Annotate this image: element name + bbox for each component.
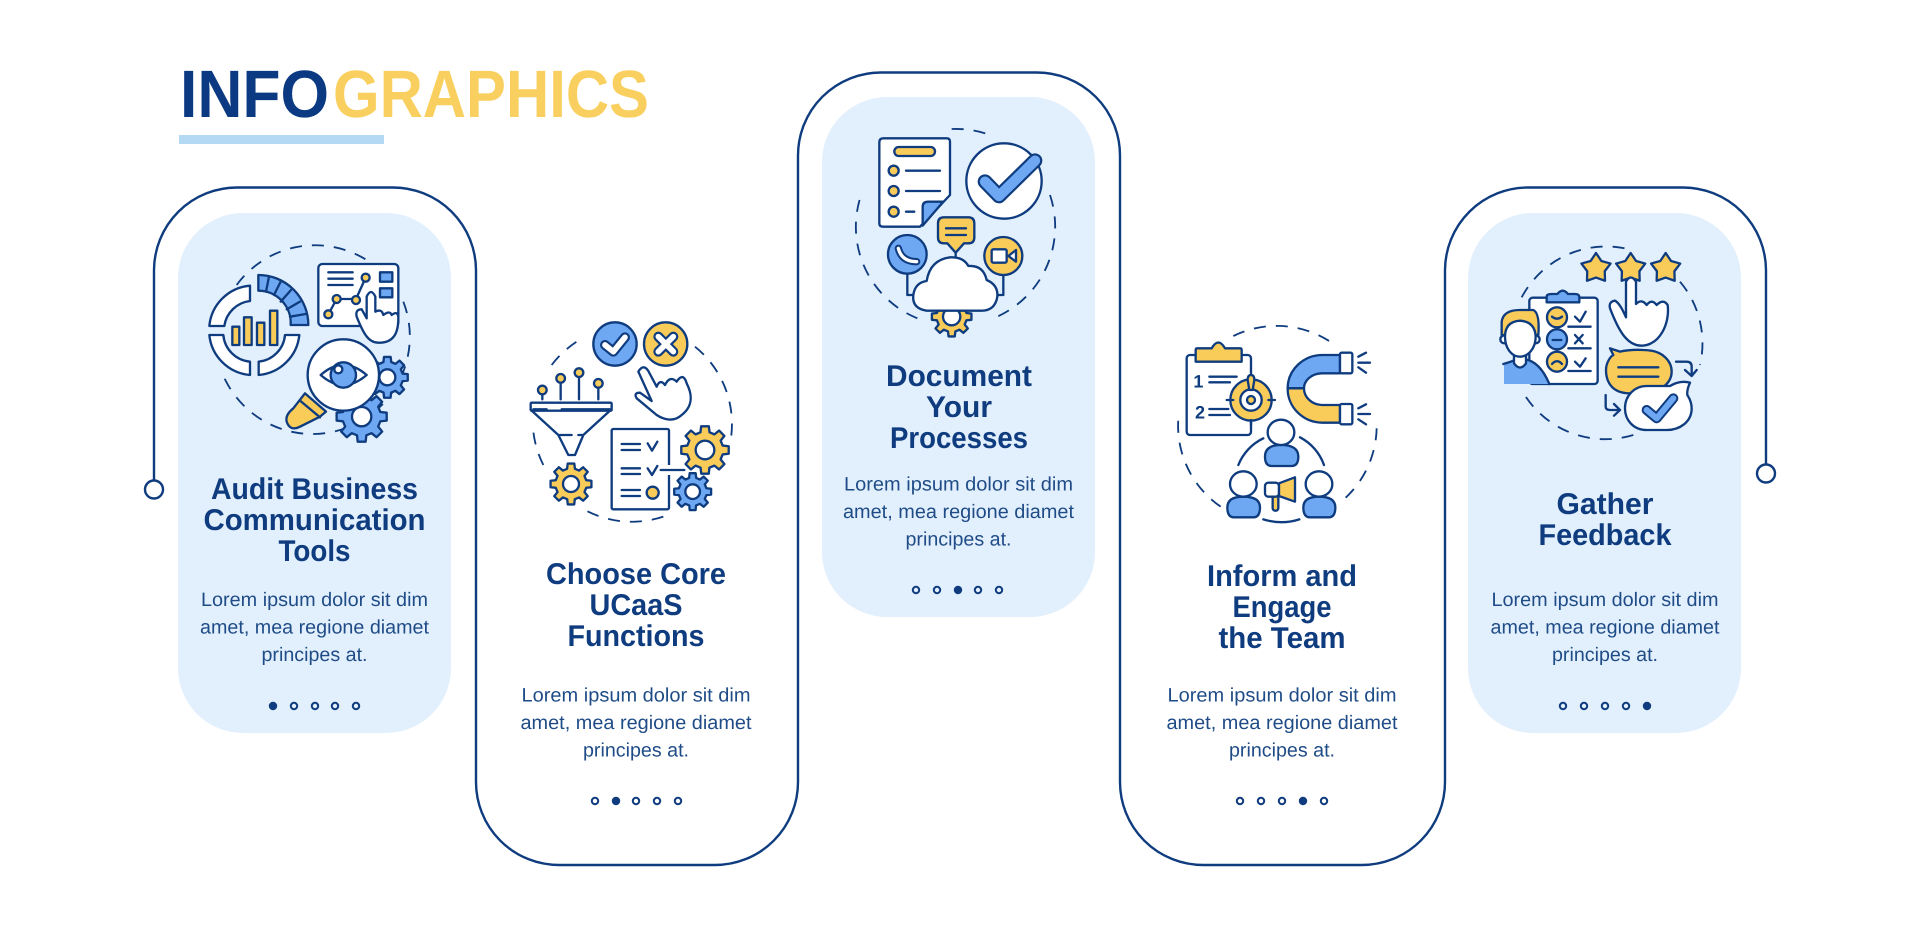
text: choose body: Lorem ipsum dolor sit dim [522,684,750,706]
text: gather body: Lorem ipsum dolor sit dim [1492,589,1718,611]
heading: choose [546,558,726,653]
heading: document: Your [926,391,992,424]
pager dots: step 4 [1237,798,1327,804]
heading: choose: Functions [568,620,704,653]
heading: document [886,360,1032,455]
heading: audit: Audit Business [211,473,418,506]
text: gather body [1490,589,1720,666]
pager dots: step 2 [592,798,681,804]
pager dots: step 3 [913,587,1002,593]
text: document body: principes at. [906,528,1012,550]
heading: audit [204,473,426,568]
panel background: document [822,97,1095,617]
title: INFOGRAPHICS: INFO [180,57,329,132]
text: audit body: Lorem ipsum dolor sit dim [201,589,428,611]
heading: audit: Communication [204,504,426,537]
heading: document: Processes [890,422,1028,455]
panel background: audit [178,213,451,733]
text: document body: Lorem ipsum dolor sit dim [844,474,1073,496]
text: gather body: principes at. [1552,644,1658,666]
heading: document: Document [886,360,1032,393]
connecting outline [145,72,1775,865]
panel background: feedback [1468,213,1741,733]
heading: inform: Engage [1232,591,1332,624]
icon: audit tools [209,245,410,442]
heading: gather: Gather [1556,488,1654,521]
heading: choose: UCaaS [590,589,682,622]
text: document body: amet, mea regione diamet [843,501,1075,523]
text: choose body: principes at. [583,740,689,762]
text: inform body: Lorem ipsum dolor sit dim [1168,684,1396,706]
heading: audit: Tools [278,535,350,568]
text: choose body: amet, mea regione diamet [520,712,752,734]
heading: inform: the Team [1218,622,1346,655]
text: inform body: principes at. [1229,740,1335,762]
text: audit body: amet, mea regione diamet [200,616,430,638]
text: inform body [1166,684,1398,762]
icon: inform and engage [1178,326,1377,522]
heading: choose: Choose Core [546,558,726,591]
icon: choose functions [531,322,732,522]
icon: document processes [856,129,1055,336]
pager dots: step 5 [1560,703,1650,709]
icon: inform and engage: 1 [1193,371,1203,391]
pager dots: step 1 [270,703,359,709]
title: INFOGRAPHICS: GRAPHICS [333,57,649,132]
title: INFOGRAPHICS [180,57,649,132]
title underline [179,135,384,144]
heading: inform [1207,560,1357,655]
text: audit body: principes at. [262,644,368,666]
icon: gather feedback [1500,246,1702,439]
icon: inform and engage: 2 [1195,402,1205,422]
text: audit body [200,589,430,666]
text: gather body: amet, mea regione diamet [1490,616,1720,638]
text: choose body [520,684,752,762]
heading: inform: Inform and [1207,560,1357,593]
heading: gather: Feedback [1538,519,1672,552]
text: inform body: amet, mea regione diamet [1166,712,1398,734]
text: document body [843,474,1075,550]
heading: gather [1538,488,1672,552]
